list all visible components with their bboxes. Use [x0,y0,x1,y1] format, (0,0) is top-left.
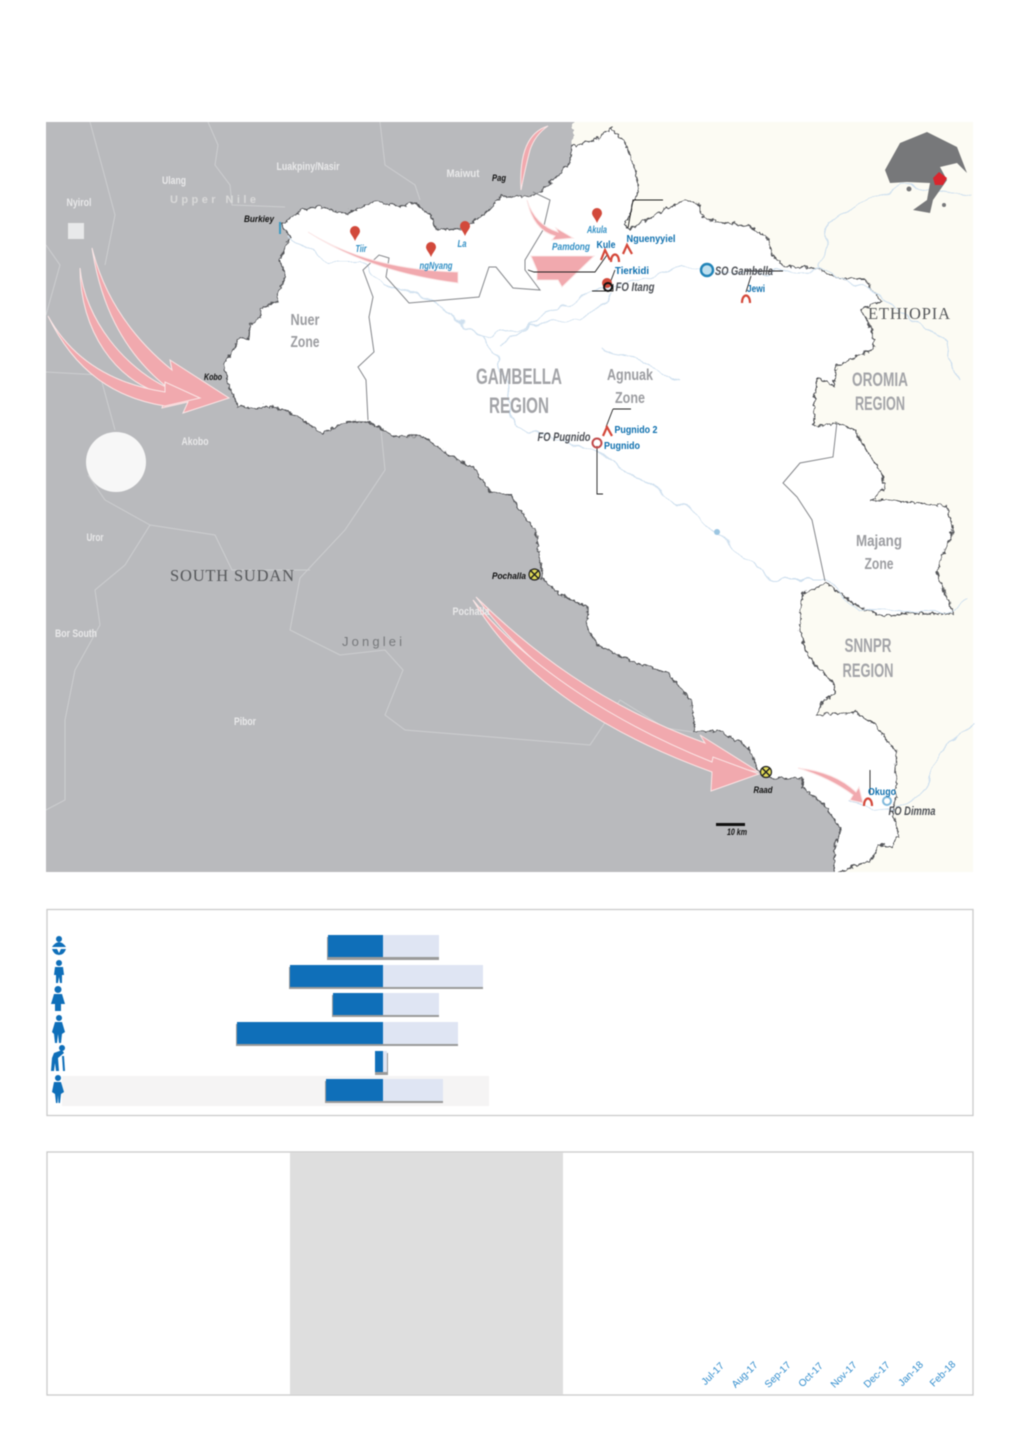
labels: zones and regions: REGION [842,661,894,682]
bar row: infants [327,935,439,960]
bar row: elderly [375,1051,388,1075]
labels: zones and regions: Agnuak [607,367,653,384]
panel: population pyramid [47,910,973,1116]
arrow: north-east flow [521,126,594,287]
bar row: total [325,1079,443,1103]
labels: camps and offices: Kule [596,239,616,251]
highlighted total row [62,1076,489,1106]
icon: woman [52,1015,65,1043]
labels: zones and regions: SNNPR [844,636,892,657]
month axis labels: Dec-17 [862,1360,893,1391]
South Sudan admin boundaries [46,122,693,810]
labels: zones and regions: ETHIOPIA [868,304,950,323]
labels: camps and offices: Pamdong [552,241,590,253]
labels: South Sudan places: Jonglei [342,634,402,649]
labels: camps and offices: FO Pugnido [538,432,590,444]
labels: camps and offices: FO Itang [616,282,654,294]
labels: camps and offices: Pugnido [604,440,640,452]
month axis labels: Jan-18 [897,1359,926,1389]
refugee camp leader lines [528,200,870,795]
labels: zones and regions: Zone [290,334,320,351]
bar row: adults [236,1022,458,1046]
bar row: boys [289,965,483,989]
icon: locator globe [885,132,967,213]
month axis labels: Oct-17 [797,1360,826,1390]
labels: entry points: Pag [492,173,506,184]
labels: entry points: La [458,238,467,250]
arrows: refugee flows into Gambella from the west [48,248,229,413]
labels: camps and offices: Tierkidi [615,265,649,277]
labels: camps and offices: Nguenyyiel [626,233,676,245]
pyramid frame [47,910,973,1116]
white circle [86,432,146,492]
labels: South Sudan places: Pochalla [452,606,490,618]
icon: girl [51,986,65,1011]
arrow: northern flow [308,232,458,283]
tent markers: camps [601,245,872,806]
labels: zones and regions: Nuer [290,312,320,329]
labels: South Sudan places: Ulang [162,175,186,187]
territories [30,106,952,890]
labels: camps and offices [538,224,936,818]
arrows: southern flow to Raad [473,597,863,803]
labels: zones and regions: Majang [856,533,902,550]
Gambella region [223,127,952,880]
grey middle band [290,1153,563,1394]
labels: entry points: Pochalla [492,571,526,582]
labels: entry points: ngNyang [420,260,453,272]
labels: entry points: Burkiey [244,214,275,225]
labels: South Sudan places: Luakpiny/Nasir [276,161,340,173]
labels: camps and offices: Okugo [868,786,896,798]
icon: total woman [52,1075,64,1103]
month axis labels: Nov-17 [829,1360,860,1391]
scale bar: 10 km [727,827,747,838]
pins: entry points [350,208,612,288]
icon: boy [54,960,64,983]
month axis labels: Jul-17 [700,1360,727,1388]
labels: entry points: Raad [754,785,773,796]
rivers [290,185,973,815]
infographic canvas [46,122,975,1396]
labels: camps and offices: Jewi [747,283,765,295]
labels: South Sudan places: Nyirol [66,197,92,209]
labels: South Sudan places: Uror [86,532,104,544]
zone boundaries [358,192,837,581]
labels: camps and offices: Pugnido 2 [614,424,658,436]
time series frame [47,1152,973,1395]
labels: South Sudan places: Akobo [182,436,209,448]
icons: age groups [51,936,66,1103]
labels: zones and regions [290,304,950,682]
scale bar [716,823,747,838]
month axis labels: Feb-18 [928,1359,959,1389]
South Sudan territory [30,106,839,890]
icon: infant [52,936,66,955]
labels: zones and regions: REGION [489,393,549,418]
labels: entry points: Kobo [204,372,222,383]
labels: South Sudan places: Maiwut [446,168,480,180]
office markers [280,222,891,805]
labels: South Sudan places: Pibor [234,716,257,728]
labels: zones and regions: GAMBELLA [476,364,562,389]
month axis labels: Sep-17 [763,1360,794,1391]
panel: map [30,106,973,890]
labels: South Sudan places: Upper Nile [170,194,256,206]
icon: elder with cane [51,1045,65,1071]
labels: camps and offices: FO Dimma [888,806,936,818]
panel: time series [47,1152,973,1395]
month axis labels: Aug-17 [730,1360,761,1391]
white square [68,223,84,239]
labels: camps and offices: Akula [586,224,607,236]
labels: entry points [204,173,773,796]
labels: South Sudan places: SOUTH SUDAN [170,566,294,585]
map background: Ethiopia neighbouring regions [46,122,973,872]
labels: camps and offices: SO Gambella [715,266,773,278]
labels: South Sudan places [55,161,490,728]
labels: zones and regions: Zone [615,390,645,407]
labels: zones and regions: OROMIA [852,370,908,391]
month axis labels [700,1359,959,1391]
labels: entry points: Tiir [356,243,367,255]
labels: South Sudan places: Bor South [55,628,97,640]
border crossing markers [529,569,772,778]
bar row: girls [332,993,439,1017]
labels: zones and regions: REGION [855,394,905,415]
labels: zones and regions: Zone [864,556,894,573]
